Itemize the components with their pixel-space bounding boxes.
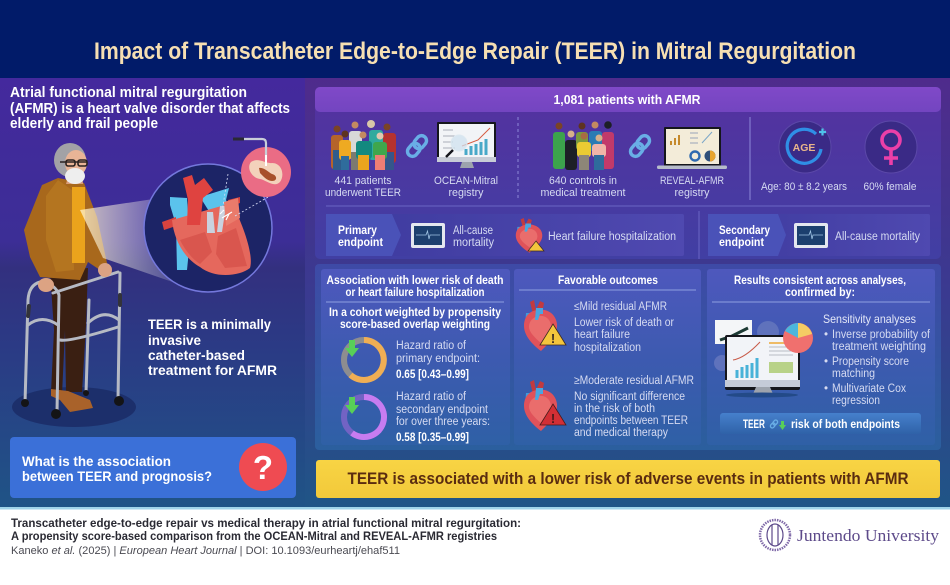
- card: favorable outcomes: No significant difference: [574, 391, 685, 403]
- card: favorable outcomes: in the risk of both: [574, 403, 655, 415]
- caption: OCEAN-Mitral: OCEAN-Mitral: [434, 175, 498, 187]
- title: Impact of Transcatheter Edge-to-Edge Repair (TEER) in Mitral Regurgitation: [94, 38, 856, 65]
- list: sensitivity analyses: •: [824, 329, 828, 341]
- citation: [11, 516, 521, 557]
- card: favorable outcomes: ≥Moderate residual AFMR: [574, 375, 694, 387]
- icon: OCEAN-Mitral monitor: [437, 122, 496, 168]
- caption: age: Age: 80 ± 8.2 years: [761, 181, 847, 193]
- card: association: score-based overlap weighting: [340, 319, 490, 331]
- callout: TEER lower risk: risk of both endpoints: [791, 419, 900, 431]
- callout: question: between TEER and prognosis?: [22, 468, 212, 484]
- card: favorable outcomes: endpoints between TEER: [574, 415, 688, 427]
- citation: A propensity score-based comparison from the OCEAN-Mitral and REVEAL-AFMR registries: [11, 529, 497, 543]
- head: [66, 170, 83, 184]
- citation: Kaneko et al. (2025) | European Heart Journal | DOI: 10.1093/eurheartj/ehaf511: [11, 545, 400, 557]
- icon: question mark: ?: [253, 449, 273, 486]
- intro text: elderly and frail people: [10, 116, 158, 132]
- inset valve: [241, 147, 291, 197]
- light cone: [80, 198, 187, 287]
- icon: female: [865, 121, 917, 173]
- icon: REVEAL-AFMR laptop: [657, 127, 727, 169]
- icon: heart with moderate warning: !: [551, 411, 555, 426]
- card: favorable outcomes: hospitalization: [574, 342, 641, 354]
- endpoint: primary: mortality: [453, 237, 494, 249]
- card: favorable outcomes: and medical therapy: [574, 427, 668, 439]
- callout: TEER lower risk: [720, 413, 921, 434]
- illustration: heart close-up: [144, 139, 291, 292]
- heading: patients: 1,081 patients with AFMR: [554, 92, 701, 107]
- top title band: [0, 0, 950, 78]
- caption: TEER patients: underwent TEER: [325, 187, 401, 199]
- list: sensitivity analyses: •: [824, 383, 828, 395]
- card: consistent results: Results consistent across analyses,: [734, 275, 906, 287]
- caption: female: 60% female: [864, 181, 916, 193]
- endpoint: primary: endpoint: [338, 237, 383, 249]
- callout: question: What is the association: [22, 453, 171, 469]
- caption: TEER patients: 441 patients: [334, 175, 392, 187]
- card: favorable outcomes: ≤Mild residual AFMR: [574, 301, 667, 313]
- list: sensitivity analyses: Multivariate Cox: [832, 383, 906, 395]
- icon: age: [779, 121, 831, 173]
- card: association: Hazard ratio of: [396, 340, 467, 352]
- card: consistent results: confirmed by:: [785, 287, 855, 299]
- card: association: or heart failure hospitalization: [346, 287, 484, 299]
- endpoint: secondary: [708, 214, 930, 256]
- icon: heart with moderate warning: [524, 380, 566, 431]
- legs: [50, 268, 88, 395]
- caption: REVEAL-AFMR: REVEAL-AFMR: [660, 175, 724, 187]
- logo: Juntendo University: Juntendo University: [797, 526, 940, 545]
- endpoint: secondary: Secondary: [719, 225, 771, 237]
- card: association: In a cohort weighted by propensity: [329, 307, 502, 319]
- icon: link: [628, 134, 652, 158]
- endpoint: secondary: endpoint: [719, 237, 764, 249]
- hands: [38, 278, 54, 292]
- icon: TEER patient group: [331, 120, 396, 170]
- icon: heart warning: [516, 218, 542, 253]
- caption: REVEAL-AFMR: registry: [674, 187, 710, 199]
- jacket: [24, 178, 107, 280]
- icon: heart with mild warning: !: [551, 331, 555, 346]
- walker: [25, 272, 120, 413]
- list: sensitivity analyses: •: [824, 356, 828, 368]
- intro text: Atrial functional mitral regurgitation: [10, 85, 247, 101]
- text: TEER description: invasive: [148, 333, 201, 348]
- chart: secondary hazard ratio donut: [344, 397, 384, 437]
- endpoint: primary: Primary: [338, 225, 378, 237]
- endpoint: primary: All-cause: [453, 225, 493, 237]
- illustration: elderly man with walker: [12, 143, 187, 427]
- card: association: primary endpoint:: [396, 353, 480, 365]
- card: association: Association with lower risk of death: [326, 275, 504, 287]
- icon: link: [405, 134, 429, 158]
- icon: control group: [553, 121, 614, 170]
- card: consistent results: [707, 269, 935, 445]
- caption: controls: medical treatment: [540, 187, 626, 199]
- callout: TEER lower risk: TEER: [743, 419, 765, 431]
- card: favorable outcomes: heart failure: [574, 329, 630, 341]
- card: association: for over three years:: [396, 416, 490, 428]
- endpoint: primary: [326, 214, 684, 256]
- icon: question mark: [239, 443, 287, 491]
- list: sensitivity analyses: Inverse probability of: [832, 329, 931, 341]
- list: sensitivity analyses: Sensitivity analyses: [823, 312, 916, 326]
- list: sensitivity analyses: treatment weighting: [832, 341, 926, 353]
- card: association: Hazard ratio of: [396, 391, 467, 403]
- list: sensitivity analyses: regression: [832, 395, 880, 407]
- intro text: (AFMR) is a heart valve disorder that affects: [10, 101, 290, 117]
- citation: Transcatheter edge-to-edge repair vs medical therapy in atrial functional mitral regurgitation:: [11, 516, 521, 530]
- card: favorable outcomes: [514, 269, 701, 445]
- panel: study population: [315, 87, 941, 259]
- panel: results: [315, 264, 941, 450]
- panel: left context: [0, 78, 950, 510]
- logo: Juntendo University: [760, 520, 940, 550]
- text: TEER description: catheter-based: [148, 348, 245, 363]
- icon: age: AGE: [793, 142, 815, 154]
- caption: OCEAN-Mitral: registry: [448, 187, 484, 199]
- card: association: secondary endpoint: [396, 404, 489, 416]
- text: TEER description: TEER is a minimally: [148, 317, 271, 332]
- icon: heart with mild warning: [524, 300, 566, 351]
- card: association: [321, 269, 510, 445]
- callout: question: [10, 437, 296, 498]
- endpoint: primary: Heart failure hospitalization: [548, 231, 676, 243]
- card: association: 0.58 [0.35–0.99]: [396, 432, 469, 444]
- chart: primary hazard ratio donut: [344, 340, 384, 380]
- card: association: 0.65 [0.43–0.99]: [396, 369, 469, 381]
- text: TEER description: treatment for AFMR: [148, 363, 277, 378]
- list: sensitivity analyses: Propensity score: [832, 356, 909, 368]
- card: favorable outcomes: Lower risk of death or: [574, 317, 674, 329]
- caption: controls: 640 controls in: [549, 175, 617, 187]
- endpoint: secondary: All-cause mortality: [835, 231, 920, 243]
- list: sensitivity analyses: matching: [832, 368, 875, 380]
- icon: analysis monitor with pie chart: [714, 320, 813, 398]
- callout: conclusion: [316, 460, 940, 498]
- card: favorable outcomes: Favorable outcomes: [558, 275, 658, 287]
- list: sensitivity analyses: [823, 312, 931, 407]
